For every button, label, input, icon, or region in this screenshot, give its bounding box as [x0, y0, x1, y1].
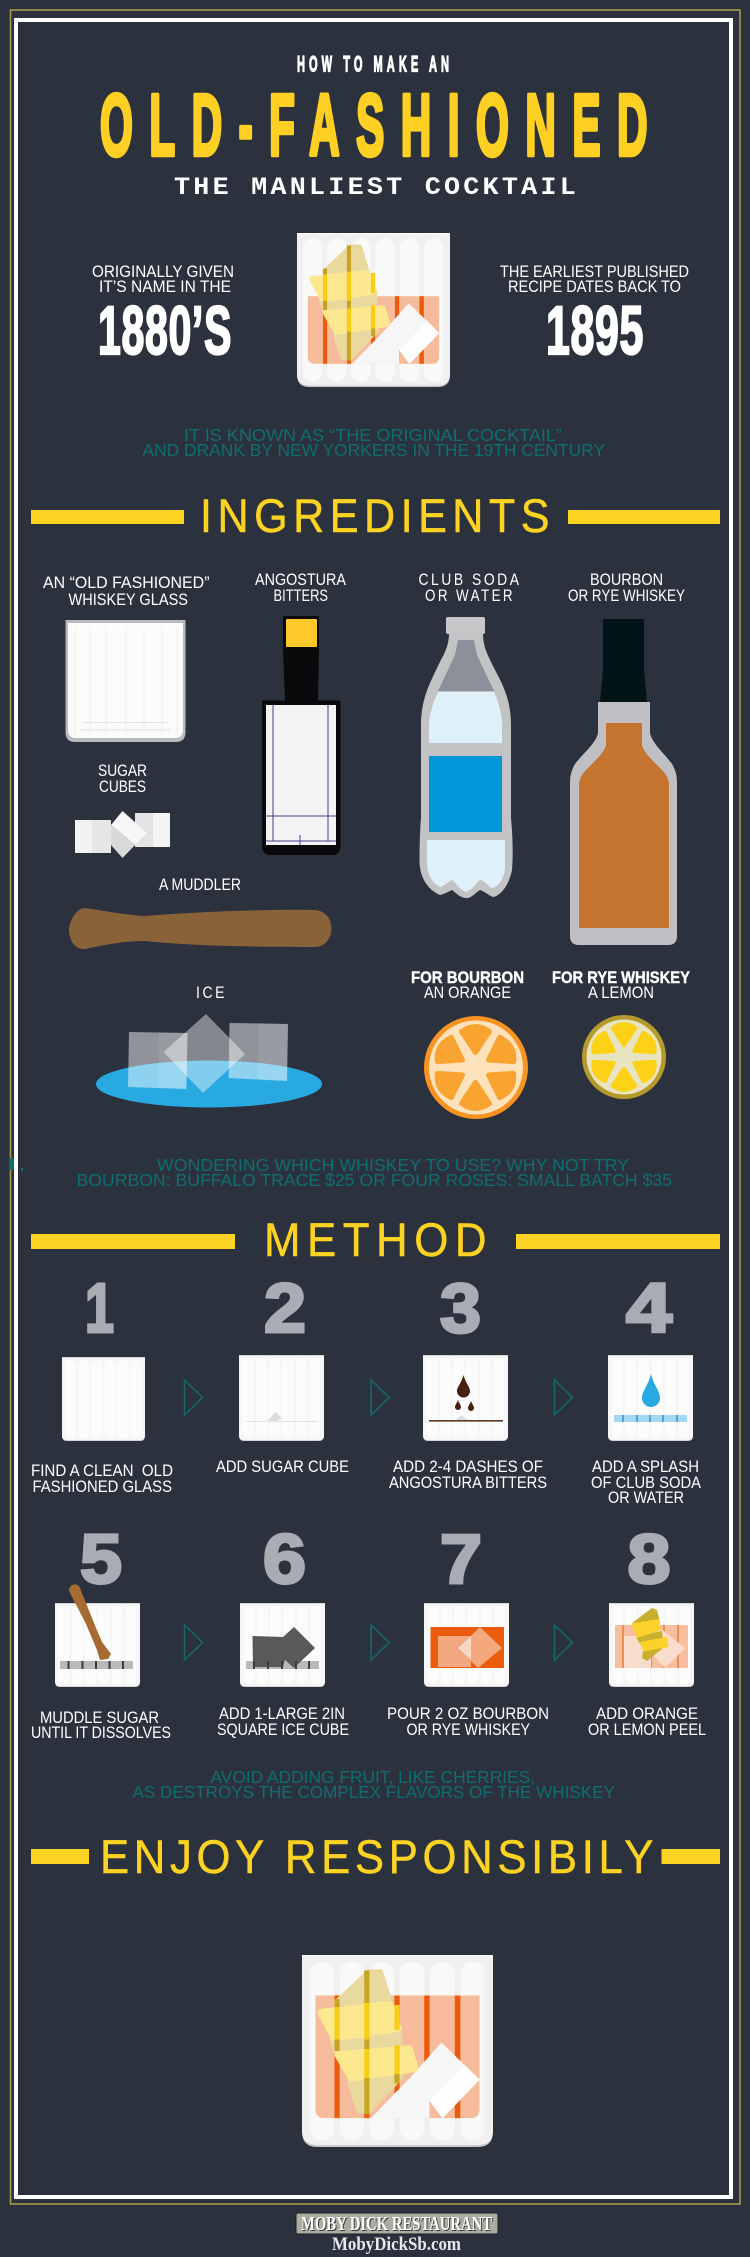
subtitle: THE MANLIEST COCKTAIL	[174, 173, 579, 202]
note: original cocktail: AND DRANK BY NEW YORKERS IN THE 19TH CENTURY	[142, 440, 605, 460]
label: bourbon: OR RYE WHISKEY	[568, 587, 685, 605]
label: club soda: OR WATER	[425, 587, 515, 605]
step 5: UNTIL IT DISSOLVES	[31, 1724, 171, 1742]
step 7	[387, 1520, 549, 1739]
step 4: OF CLUB SODA	[591, 1474, 701, 1492]
note: avoid fruit	[132, 1767, 615, 1802]
step 1: FIND A CLEAN OLD	[31, 1462, 173, 1480]
heading: enjoy responsibily: ENJOY RESPONSIBILY	[100, 1830, 658, 1883]
label: for bourbon	[411, 969, 524, 1002]
heading: ingredients	[31, 489, 720, 542]
icon: club soda bottle	[420, 617, 513, 898]
step 1	[31, 1269, 173, 1496]
label: angostura	[255, 571, 346, 605]
label: angostura: BITTERS	[274, 587, 328, 605]
step 4: OR WATER	[608, 1489, 684, 1507]
note: avoid fruit: AS DESTROYS THE COMPLEX FLAVORS OF THE WHISKEY	[132, 1782, 615, 1802]
step 7: POUR 2 OZ BOURBON	[387, 1705, 549, 1723]
step 7: OR RYE WHISKEY	[406, 1721, 530, 1739]
icon: old-fashioned cocktail	[297, 233, 450, 387]
label: bourbon	[568, 571, 685, 605]
icon: muddler	[69, 908, 332, 949]
step 4	[591, 1269, 701, 1507]
icon: orange slice	[424, 1016, 528, 1119]
fact: earliest recipe: 1895	[546, 292, 644, 369]
arrow	[184, 1380, 202, 1415]
heading: method: METHOD	[264, 1213, 493, 1266]
fact: name origin	[92, 263, 234, 369]
arrow	[554, 1380, 572, 1415]
heading: method	[31, 1213, 720, 1266]
note: which whiskey: WONDERING WHICH WHISKEY TO USE? WHY NOT TRY	[157, 1155, 629, 1175]
label: whiskey glass: AN “OLD FASHIONED”	[43, 574, 210, 592]
note: original cocktail	[142, 425, 605, 460]
fact: earliest recipe	[500, 263, 689, 369]
label: for rye whiskey: A LEMON	[588, 984, 654, 1002]
arrow	[371, 1625, 389, 1660]
fact: name origin: ORIGINALLY GIVEN	[92, 263, 234, 281]
step 3: ANGOSTURA BITTERS	[389, 1474, 547, 1492]
label: bourbon: BOURBON	[590, 571, 663, 589]
note: original cocktail: IT IS KNOWN AS “THE ORIGINAL COCKTAIL”	[184, 425, 562, 445]
fact: name origin: 1880’S	[98, 292, 232, 369]
label: for rye whiskey: FOR RYE WHISKEY	[552, 969, 690, 987]
fact: earliest recipe: RECIPE DATES BACK TO	[508, 278, 681, 296]
arrow	[184, 1625, 202, 1660]
label: for bourbon: AN ORANGE	[424, 984, 511, 1002]
icon: bitters bottle	[262, 616, 340, 855]
step 4: 4	[626, 1269, 672, 1347]
label: sugar cubes: CUBES	[99, 778, 146, 796]
icon: whiskey bottle	[570, 619, 677, 945]
arrow	[554, 1625, 572, 1660]
step 3: 3	[440, 1269, 481, 1347]
step 3: ADD 2-4 DASHES OF	[393, 1458, 543, 1476]
note: avoid fruit: AVOID ADDING FRUIT, LIKE CHERRIES,	[210, 1767, 535, 1787]
step 7: 7	[440, 1520, 482, 1598]
step 3	[389, 1269, 547, 1492]
fact: name origin: IT’S NAME IN THE	[99, 278, 231, 296]
footer badge: MOBY DICK RESTAURANT	[302, 2214, 493, 2236]
label: for rye whiskey	[552, 969, 690, 1002]
step 6	[217, 1520, 349, 1739]
arrow	[371, 1380, 389, 1415]
label: ice: ICE	[196, 984, 227, 1002]
label: sugar cubes	[98, 762, 147, 796]
step 8: OR LEMON PEEL	[588, 1721, 706, 1739]
step 4: ADD A SPLASH	[592, 1458, 699, 1476]
step 2	[216, 1269, 349, 1476]
step 5	[31, 1520, 171, 1742]
footer badge: MOBY DICK RESTAURANT	[301, 2213, 492, 2235]
pre-title: HOW TO MAKE AN	[297, 52, 453, 76]
label: club soda	[418, 571, 522, 605]
icon: ice on water	[96, 1014, 322, 1108]
note: which whiskey: BOURBON: BUFFALO TRACE $25 OR FOUR ROSES: SMALL BATCH $35	[76, 1170, 672, 1190]
step 1: FASHIONED GLASS	[32, 1478, 172, 1496]
step 5: 5	[80, 1520, 122, 1598]
icon: lemon slice	[582, 1015, 666, 1099]
step 6: ADD 1-LARGE 2IN	[219, 1705, 345, 1723]
icon: finished cocktail	[302, 1955, 493, 2147]
step 6: 6	[263, 1520, 306, 1598]
step 1: 1	[85, 1269, 114, 1347]
label: whiskey glass	[43, 574, 210, 609]
fact: earliest recipe: THE EARLIEST PUBLISHED	[500, 263, 689, 281]
step 8	[588, 1520, 706, 1739]
step 8: ADD ORANGE	[596, 1705, 698, 1723]
label: club soda: CLUB SODA	[418, 571, 522, 589]
label: whiskey glass: WHISKEY GLASS	[68, 591, 188, 609]
label: muddler: A MUDDLER	[159, 876, 241, 894]
step 6: SQUARE ICE CUBE	[217, 1721, 349, 1739]
note: which whiskey	[10, 1155, 672, 1190]
label: sugar cubes: SUGAR	[98, 762, 147, 780]
label: angostura: ANGOSTURA	[255, 571, 346, 589]
step 5: MUDDLE SUGAR	[40, 1709, 159, 1727]
footer url: MobyDickSb.com	[332, 2234, 461, 2255]
icon: sugar cubes	[75, 811, 170, 858]
step 2: ADD SUGAR CUBE	[216, 1458, 349, 1476]
icon: whiskey glass	[66, 620, 186, 742]
step 8: 8	[628, 1520, 670, 1598]
label: for bourbon: FOR BOURBON	[411, 969, 524, 987]
step 2: 2	[264, 1269, 306, 1347]
heading: ingredients: INGREDIENTS	[200, 489, 555, 542]
